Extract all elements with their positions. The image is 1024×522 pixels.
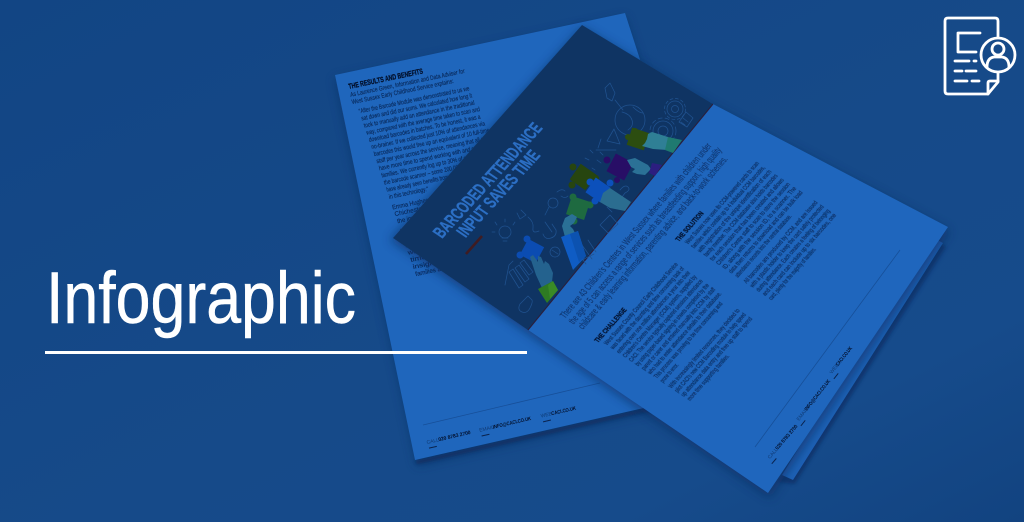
back sheet text: results and benefits: families. We currently log up to 30% of attendances via [381, 148, 498, 180]
back sheet text: results and benefits: Chichester Children's Centre, describes [394, 189, 503, 218]
column: the challenge: was faced with the daunting and time consuming task of [609, 266, 686, 351]
second page under front sheet [778, 235, 946, 484]
back sheet text: results and benefits: during our busiest drop-in sessions [402, 213, 511, 242]
column: the solution: Children's Centre staff to scan to store the session [715, 181, 792, 266]
back sheet text: results and benefits: barcodes this would free up an equivalent of 10 full-time [373, 127, 490, 158]
puzzle piece: blue lower [516, 236, 544, 263]
column: the solution [673, 155, 845, 304]
back sheet text: results and benefits: in this technology." [388, 186, 429, 201]
title underline [45, 351, 527, 354]
intro paragraph [558, 140, 733, 332]
cover panel [393, 25, 713, 330]
back sheet text: results and benefits: sat down and did our sums. We calculated how long it [361, 92, 473, 122]
icon: document with user profile [945, 18, 1015, 94]
back sheet text: results and benefits: "I've particularly noticed the benefits [400, 206, 509, 235]
column: the challenge: This process was proving to be time consuming and [653, 301, 725, 380]
column: the challenge: entering over one million attendances a year into their [615, 270, 693, 355]
cover title: INPUT SAVES TIME [452, 147, 544, 240]
intro paragraph: There are 43 Children's Centres in West Sussex where families with children under [558, 141, 715, 321]
back sheet footer [423, 383, 600, 449]
column: the solution: and each card can include up to six barcodes, one [761, 212, 838, 297]
cover title accent bar [466, 236, 482, 254]
front sheet footer: EMAIL [796, 407, 810, 422]
line-art doodles [492, 83, 693, 312]
back sheet text: results and benefits: sometimes with many families when [405, 220, 514, 250]
back sheet text: results and benefits: no-brainer. If we collected just 10% of attendances via [371, 120, 486, 151]
front sheet footer: 020 8783 2700 [774, 424, 800, 451]
back sheet text: results and benefits: West Sussex Early Childhood Service explains: [351, 78, 454, 106]
column: the challenge: prone to error. [659, 362, 681, 384]
back sheet text: results and benefits: "After the Barcode Module was demonstrated to us we [358, 85, 470, 115]
column: the solution: families which contain up to 4 individual CCM barcodes, [690, 165, 767, 250]
back sheet text: results and benefits: we scan them in and save a lot of [406, 227, 516, 257]
back document sheet [335, 13, 747, 466]
back sheet footer: CALL [426, 437, 440, 446]
column: the challenge [592, 255, 763, 404]
column: the challenge: With increasingly limited resources, they decided to [667, 308, 742, 390]
intro paragraph: childcare & early learning information, parenting advice, and back-to-work schemes. [576, 155, 731, 332]
back sheet text: results and benefits [348, 54, 524, 284]
column: the solution: with registration of the unique identification of each [696, 169, 774, 254]
back sheet text: results and benefits: As Laurence Green, Information and Data Adviser for [350, 68, 466, 99]
front sheet footer: WEB [829, 362, 841, 375]
column: the challenge: who had to enter attendance details to their database. [646, 291, 724, 376]
puzzle piece: bright blue [585, 177, 614, 204]
back sheet footer: EMAIL [479, 425, 495, 434]
puzzle piece: olive upper [625, 128, 649, 150]
back sheet footer: WEB [540, 411, 553, 420]
puzzle piece: green [566, 194, 594, 224]
intro paragraph: the age of 5 can access a range of services such as breastfeeding support, high quality [567, 146, 725, 327]
front document sheet [390, 25, 950, 498]
back sheet text: results and benefits: families and children." [415, 259, 475, 278]
column: the solution: West Sussex now uses its CCM-powered cards to scan [684, 160, 761, 246]
back sheet text: results and benefits: the barcode scanner – some 200,000 per year – and we [383, 156, 501, 187]
back sheet footer: 020 8783 2700 [438, 430, 471, 443]
front sheet footer: INFO@CACI.CO.UK [804, 379, 832, 412]
back sheet text: results and benefits: staff per year across the service, meaning that all staff [376, 135, 491, 165]
front sheet footer: CALL [767, 447, 780, 460]
back sheet text: results and benefits: insight and more time with our [412, 241, 522, 271]
column: the solution: with a plastic holder to keep the card safely protected [748, 204, 826, 289]
column: the solution: ID, along with the session ID, to a scanner. The [721, 185, 799, 271]
back sheet text: results and benefits: Emma Hughes, Family Information Officer at [392, 182, 501, 211]
front sheet footer: CACI.CO.UK [835, 346, 854, 367]
hand and blue sleeve: reaching up [561, 214, 586, 270]
back sheet text: results and benefits: way, compared with the average time taken to scan and [365, 106, 481, 137]
back sheet footer: CACI.CO.UK [551, 406, 577, 417]
column: the solution: during attendance. Each creates a feeling of belonging [755, 208, 832, 293]
back sheet footer: INFO@CACI.CO.UK [492, 416, 532, 431]
puzzle piece: purple [604, 153, 634, 183]
column: the challenge: THE CHALLENGE [592, 306, 629, 344]
back sheet text: results and benefits: the impact of the barcode scanner: [397, 200, 486, 225]
column: the solution: All barcodes are produced by CCM, and are issued [742, 200, 820, 285]
column: the challenge: CACI. The service typically captured sessions attendance [628, 278, 705, 363]
back sheet text: results and benefits: have already seen benefits from the investment we've made [386, 163, 503, 194]
back sheet text: results and benefits: time for staff, and gives us an [410, 234, 519, 264]
hand and purple sleeve [627, 158, 662, 176]
column: the solution: attendance records into the central database. [734, 213, 794, 279]
front sheet footer [755, 250, 900, 464]
back sheet text: results and benefits: THE RESULTS AND BENEFITS [348, 67, 424, 91]
column: the challenge: pilot CACI's new CCM Barcoding module to help speed [673, 312, 748, 394]
column: the solution: for each session that has been created and allows [709, 177, 786, 262]
column: the challenge: parent or carer and entered manually into CCM by staff [640, 287, 717, 372]
column: the challenge: by using paper-based signing-in sheets completed by the [634, 282, 711, 367]
hand: right of blue piece [600, 188, 631, 211]
column: the solution: family member. The CCM database also holds barcodes [703, 173, 780, 258]
column: the solution: card, plenty for the majority of families. [767, 246, 818, 301]
puzzle piece: olive [568, 164, 599, 190]
column: the solution: data then returns to download and can be bulk load [727, 190, 805, 275]
back sheet text: results and benefits: took to manually add an attendance in the traditional [363, 100, 475, 130]
back sheet text: results and benefits: download barcodes in batches. To be honest, it was a [368, 114, 482, 144]
back sheet text: results and benefits: have more time to spend working with and supporting [378, 141, 495, 172]
hand and teal sleeve: upper [642, 132, 682, 153]
column: the challenge: West Sussex County Council Early Childhood Service [603, 261, 680, 347]
column: the challenge: up attendance data entry and free up staff to spend [680, 316, 754, 398]
column: the challenge: Children's Centre Manager (CCM) system, supplied by [622, 274, 699, 359]
title: Infographic: Infographic [46, 258, 356, 339]
cover title: BARCODED ATTENDANCE [429, 119, 547, 241]
column: the solution: THE SOLUTION [673, 210, 706, 243]
column: the challenge: more time supporting families. [686, 353, 731, 402]
hand and green sleeve: lower [530, 255, 558, 303]
cover title [429, 119, 561, 251]
